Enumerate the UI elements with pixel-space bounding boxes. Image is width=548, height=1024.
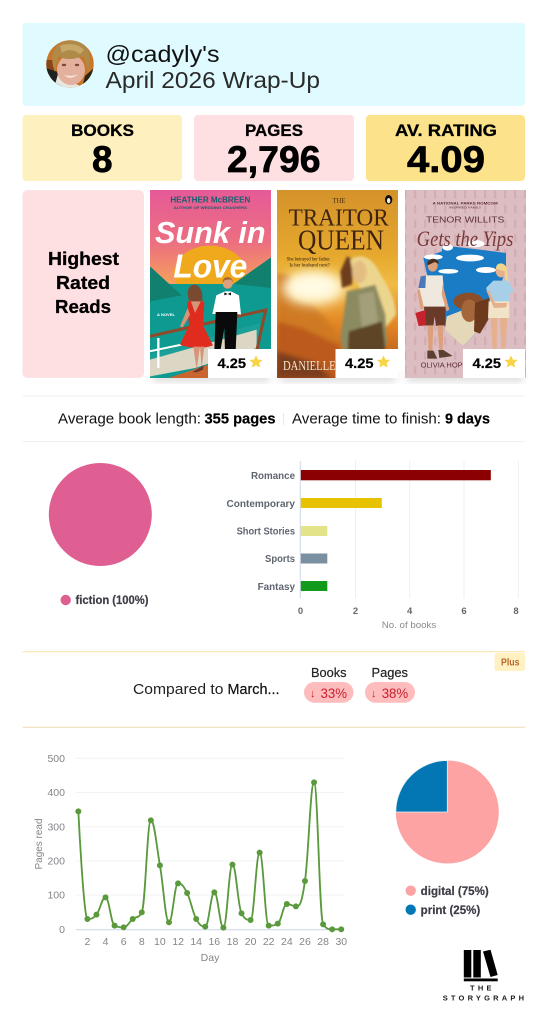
legend: digital: digital (75%) xyxy=(421,886,489,898)
heading: username: @cadyly's xyxy=(106,41,220,67)
pie chart: format xyxy=(396,760,499,917)
y axis labels: 300 xyxy=(47,822,65,834)
x axis labels: 2 xyxy=(84,936,90,948)
figure: man xyxy=(415,259,453,359)
y axis title: Pages read xyxy=(33,818,45,870)
icon: avatar xyxy=(46,40,94,88)
panel: highest rated reads label: Reads xyxy=(55,296,111,317)
bar: Sports: Sports xyxy=(265,554,295,565)
axis labels: books: 0 xyxy=(298,606,303,617)
cover text: title: TENOR WILLITS xyxy=(426,215,505,225)
stat card: pages xyxy=(194,115,354,181)
bar: Short Stories xyxy=(237,526,327,538)
wordmark: THE xyxy=(470,984,492,993)
comparison: books: Books xyxy=(311,665,347,680)
icon: publisher logo xyxy=(385,195,392,204)
legend: fiction: fiction (100%) xyxy=(76,595,149,607)
comparison to March: Compared to xyxy=(133,682,224,698)
bar: Fantasy xyxy=(258,581,327,593)
x axis labels: 22 xyxy=(263,936,275,948)
axis labels: books xyxy=(298,606,519,631)
axis labels: books: 6 xyxy=(461,606,467,617)
axis labels: books: No. of books xyxy=(382,620,436,631)
x axis labels: 16 xyxy=(208,936,220,948)
rating badge: book 1: 4.25 xyxy=(218,355,246,371)
stat card: pages: 2,796 xyxy=(227,139,320,180)
book cover: Sunk in Love: A NOVEL xyxy=(157,312,176,317)
badge: Plus: Plus xyxy=(501,658,520,668)
stat card: books: BOOKS xyxy=(71,121,134,140)
axis labels: books: 8 xyxy=(513,606,519,617)
bar chart: genres xyxy=(226,461,519,631)
book shadows xyxy=(153,372,523,382)
book cover: Tenor Willits Gets the Yips xyxy=(405,190,526,378)
book cover: Sunk in Love xyxy=(150,190,271,378)
stat card: average rating: 4.09 xyxy=(407,139,485,180)
comparison: books: 33% xyxy=(320,685,347,701)
stat card: books: 8 xyxy=(92,139,112,180)
book cover: The Traitor Queen xyxy=(277,190,398,378)
x axis labels: 20 xyxy=(245,936,257,948)
y axis labels: 100 xyxy=(47,890,65,902)
heading: wrap-up month: April 2026 Wrap-Up xyxy=(106,67,320,93)
book cover: The Traitor Queen: TRAITOR xyxy=(289,204,389,231)
badge: Plus xyxy=(495,653,525,671)
logo: The StoryGraph xyxy=(443,950,524,1003)
book cover: Tenor Willits Gets the Yips: INSPIRED FAMILY xyxy=(449,206,482,210)
x axis labels: 12 xyxy=(172,936,184,948)
axis labels: books: 2 xyxy=(353,606,358,617)
y axis labels: 0 xyxy=(59,924,65,936)
bar: Romance: Romance xyxy=(251,471,295,482)
y axis labels: 500 xyxy=(47,753,65,765)
x axis labels: 26 xyxy=(299,936,311,948)
figure: warrior xyxy=(338,255,398,349)
x axis labels: 4 xyxy=(103,936,109,948)
pie chart: fiction xyxy=(49,463,152,607)
stat card: books xyxy=(22,115,182,181)
book cover: The Traitor Queen: She betrayed her father. xyxy=(287,258,331,263)
legend: print: print (25%) xyxy=(421,905,480,917)
book cover: Sunk in Love: Love xyxy=(173,248,247,285)
x axis labels: 10 xyxy=(154,936,166,948)
y axis labels: 200 xyxy=(47,856,65,868)
panel: highest rated reads label: Rated xyxy=(56,272,110,293)
cover text: author: HEATHER McBREEN xyxy=(170,196,251,205)
x axis title: Day xyxy=(201,952,220,964)
data series xyxy=(75,779,344,932)
cover text: tagline: A NATIONAL PARKS ROMCOM xyxy=(433,202,498,206)
text: average stats: Average time to finish: xyxy=(292,412,441,428)
book cover: The Traitor Queen: Is her husband next? xyxy=(289,264,330,269)
book cover: Tenor Willits Gets the Yips: Gets the Yips xyxy=(417,226,513,251)
comparison: pages: Pages xyxy=(372,665,408,680)
bar: Fantasy: Fantasy xyxy=(258,582,295,593)
comparison to March: March... xyxy=(228,682,280,698)
comparison: books: ↓ xyxy=(310,688,316,700)
cover text: title: Sunk in xyxy=(155,216,266,250)
logo: The StoryGraph: STORYGRAPH xyxy=(443,994,524,1003)
x axis labels: 28 xyxy=(317,936,329,948)
cover text: author: DANIELLE xyxy=(283,359,336,374)
rating badge: book 2 xyxy=(336,349,398,378)
cover text: author: OLIVIA HOP xyxy=(421,362,463,369)
text: average stats: 355 pages xyxy=(204,412,276,428)
x axis labels xyxy=(84,936,347,948)
stat card: average rating xyxy=(366,115,525,181)
book cover: Sunk in Love: AUTHOR OF WEDDING CRASHERS xyxy=(174,205,247,210)
rating badge: book 3 xyxy=(463,349,525,378)
panel: header xyxy=(22,23,525,106)
comparison: pages: 38% xyxy=(382,685,408,701)
x axis labels: 18 xyxy=(227,936,238,948)
rating badge: book 3: 4.25 xyxy=(472,355,501,371)
comparison: pages: ↓ xyxy=(371,688,376,700)
y axis labels: 400 xyxy=(47,787,65,799)
cover text: title: THE xyxy=(333,196,346,205)
book cover: The Traitor Queen: QUEEN xyxy=(298,225,384,256)
comparison to March xyxy=(133,665,415,703)
stat card: average rating: AV. RATING xyxy=(395,121,497,140)
text: average stats: 9 days xyxy=(445,412,490,428)
x axis labels: 6 xyxy=(121,936,127,948)
bar: Sports xyxy=(265,554,327,565)
text: average stats xyxy=(58,412,490,428)
x axis labels: 30 xyxy=(335,936,347,948)
comparison: books xyxy=(304,665,354,703)
x axis labels: 24 xyxy=(281,936,293,948)
figure: man xyxy=(212,277,241,351)
axis labels: books: 4 xyxy=(407,606,413,617)
x axis labels: 8 xyxy=(139,936,145,948)
text: average stats: Average book length: xyxy=(58,412,201,428)
panel: highest rated reads label: Highest xyxy=(48,248,119,269)
figure: woman xyxy=(180,285,213,372)
rating badge: book 2: 4.25 xyxy=(345,355,374,371)
rating badge: book 1 xyxy=(208,349,271,378)
x axis labels: 14 xyxy=(190,936,202,948)
line chart: pages read per day xyxy=(33,753,347,964)
bar: Contemporary xyxy=(226,498,382,510)
comparison: pages xyxy=(365,665,415,703)
bar: Contemporary: Contemporary xyxy=(226,499,295,510)
stat card: pages: PAGES xyxy=(245,121,303,140)
icon: books on shelf xyxy=(464,950,498,981)
bar: Short Stories: Short Stories xyxy=(237,526,295,538)
panel: highest rated reads label xyxy=(22,190,144,378)
figure: woman xyxy=(486,263,514,349)
y axis labels xyxy=(47,753,65,936)
bar: Romance xyxy=(251,470,491,482)
